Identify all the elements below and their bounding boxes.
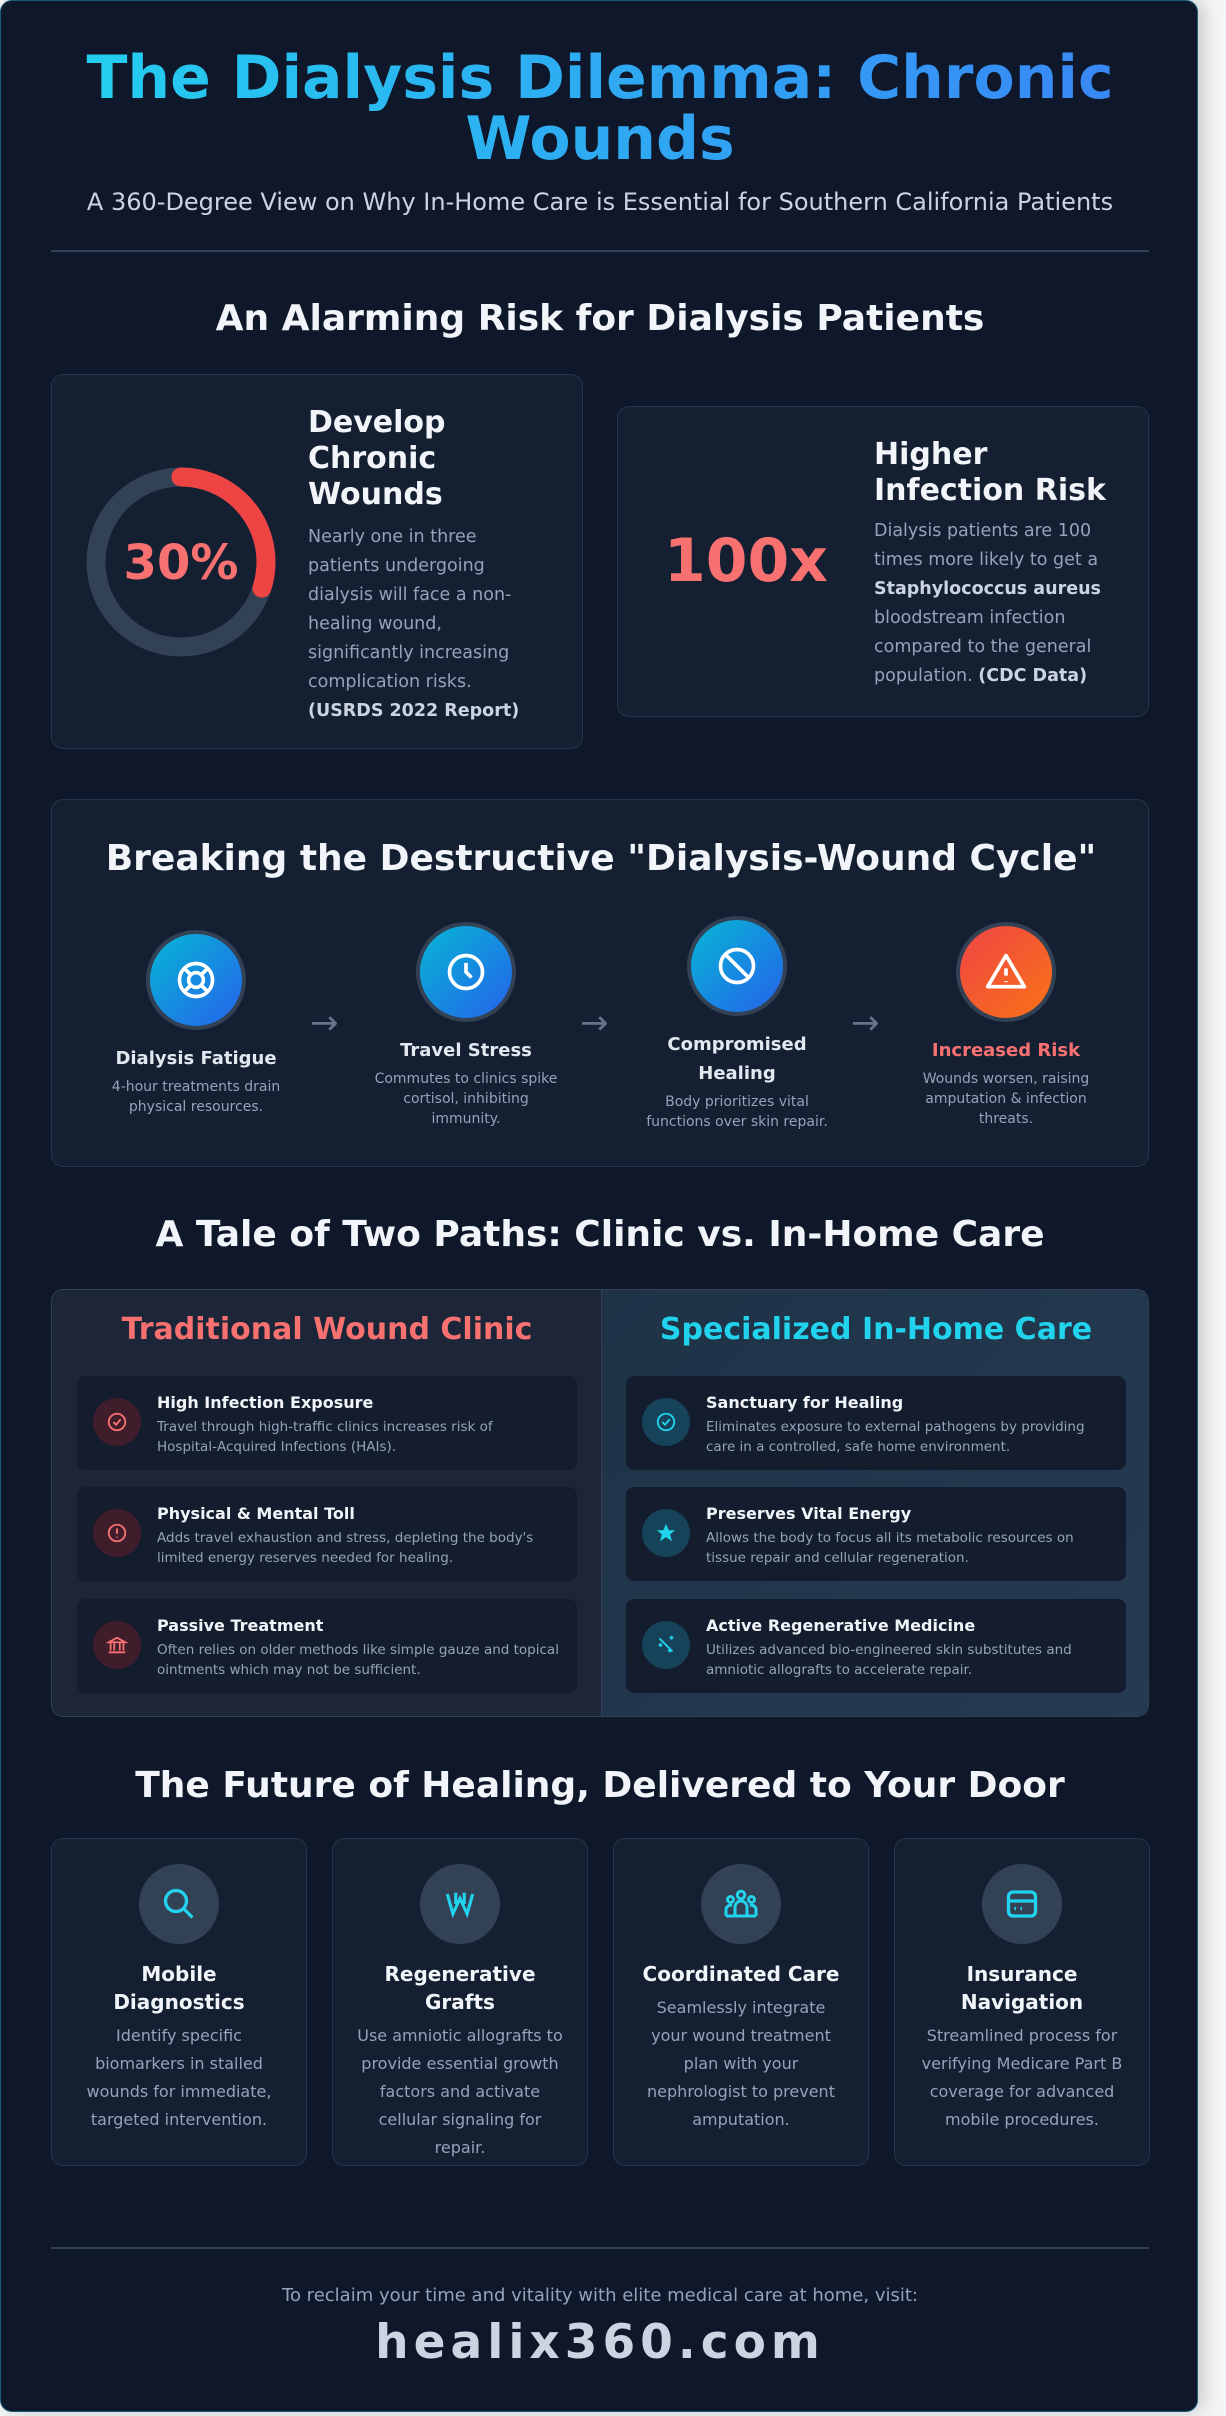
step: dialysis fatigue: Dialysis Fatigue [115,1048,277,1069]
card: insurance navigation [894,1838,1150,2166]
step: travel stress: Travel Stress [400,1040,532,1061]
item: infection exposure: High Infection Exposure [157,1393,373,1412]
item: passive treatment: Often relies on older methods like simple gauze and topical ointments which may not be sufficient. [157,1642,559,1678]
text: develop chronic wounds: Develop [308,405,446,440]
heading: two paths: A Tale of Two Paths: Clinic vs. In-Home Care [155,1214,1045,1255]
item: regenerative medicine: Active Regenerative Medicine [706,1616,975,1635]
step: dialysis fatigue: 4-hour treatments drain physical resources. [112,1079,280,1115]
panel: 100x stat [617,406,1149,717]
item: sanctuary [626,1376,1126,1470]
chart: ring 30%: 30% [124,535,238,591]
text: develop chronic wounds: Nearly one in three patients undergoing dialysis will face a non-healing wound, significantly increasing complication risks. (USRDS 2022 Report) [308,527,519,721]
footer url: healix360.com [375,2315,825,2370]
card: insurance navigation: Streamlined process for verifying Medicare Part B coverage for advanced mobile procedures. [922,2026,1122,2129]
footer text: To reclaim your time and vitality with elite medical care at home, visit: [282,2285,918,2306]
item: vital energy: Preserves Vital Energy [706,1504,911,1523]
step: increased risk: Increased Risk [932,1040,1080,1061]
panel: comparison [51,1289,1149,1717]
stat: 100x: 100x [664,526,828,596]
item: infection exposure: Travel through high-traffic clinics increases risk of Hospital‑Acquired Infections (HAIs). [157,1419,493,1455]
title: Wounds [465,104,735,174]
card: insurance navigation: Insurance [967,1962,1077,1986]
subtitle: A 360-Degree View on Why In-Home Care is Essential for Southern California Patients [87,188,1113,216]
text: infection risk: Dialysis patients are 100 times more likely to get a Staphylococcus aureus bloodstream infection compared to the general population. (CDC Data) [874,521,1101,686]
step: compromised healing: Body prioritizes vital functions over skin repair. [646,1094,828,1130]
column: in-home care: Specialized In-Home Care [660,1312,1092,1347]
column: traditional clinic [52,1290,602,1718]
heading: alarming risk: An Alarming Risk for Dialysis Patients [216,298,984,339]
column: in-home care [602,1290,1150,1718]
card: coordinated care: Seamlessly integrate your wound treatment plan with your nephrologist to prevent amputation. [647,1998,835,2129]
card: regenerative grafts [332,1838,588,2166]
step: travel stress [375,922,557,1127]
panel: dialysis-wound cycle [51,799,1149,1167]
column: traditional clinic: Traditional Wound Clinic [122,1312,532,1347]
item: physical toll: Physical & Mental Toll [157,1504,355,1523]
text: develop chronic wounds: Chronic [308,441,436,476]
item: vital energy [626,1487,1126,1581]
text: develop chronic wounds [308,405,519,721]
item: sanctuary: Sanctuary for Healing [706,1393,903,1412]
item: physical toll: Adds travel exhaustion and stress, depleting the body's limited energy reserves needed for healing. [157,1530,533,1566]
step: compromised healing [646,916,828,1130]
step: increased risk: Wounds worsen, raising amputation & infection threats. [923,1071,1089,1127]
arrow: → [580,1003,608,1043]
heading: future of healing: The Future of Healing, Delivered to Your Door [135,1765,1065,1806]
arrow: → [310,1003,338,1043]
card: mobile diagnostics: Mobile [141,1962,217,1986]
text: infection risk [874,437,1106,686]
card: mobile diagnostics: Identify specific biomarkers in stalled wounds for immediate, targeted intervention. [87,2026,271,2129]
text: infection risk: Infection Risk [874,473,1106,508]
step: compromised healing: Healing [698,1063,776,1084]
card: coordinated care: Coordinated Care [643,1962,839,1986]
card: insurance navigation: Navigation [961,1990,1083,2014]
card: regenerative grafts: Use amniotic allografts to provide essential growth factors and activate cellular signaling for repair. [357,2026,563,2157]
item: vital energy: Allows the body to focus all its metabolic resources on tissue repair and cellular regeneration. [706,1530,1074,1566]
heading: cycle: Breaking the Destructive "Dialysis-Wound Cycle" [106,838,1096,879]
text: infection risk: Higher [874,437,987,472]
card: mobile diagnostics: Diagnostics [113,1990,245,2014]
card: mobile diagnostics [51,1838,307,2166]
title [1,48,1199,170]
item: sanctuary: Eliminates exposure to external pathogens by providing care in a controlled, safe home environment. [706,1419,1085,1455]
item: infection exposure [77,1376,577,1470]
item: passive treatment: Passive Treatment [157,1616,323,1635]
card: coordinated care [613,1838,869,2166]
step: compromised healing: Compromised [667,1034,807,1055]
chart: ring 30% [86,468,276,656]
title: The Dialysis Dilemma: Chronic [86,43,1114,113]
item: regenerative medicine [626,1599,1126,1693]
item: regenerative medicine: Utilizes advanced bio-engineered skin substitutes and amniotic allografts to accelerate repair. [706,1642,1072,1678]
step: dialysis fatigue [112,930,280,1115]
step: increased risk [923,922,1089,1127]
card: regenerative grafts: Regenerative [384,1962,536,1986]
item: passive treatment [77,1599,577,1693]
step: travel stress: Commutes to clinics spike cortisol, inhibiting immunity. [375,1071,557,1127]
card: regenerative grafts: Grafts [425,1990,495,2014]
arrow: → [851,1003,880,1043]
panel: 30% stat [51,374,583,749]
item: physical toll [77,1487,577,1581]
text: develop chronic wounds: Wounds [308,477,443,512]
